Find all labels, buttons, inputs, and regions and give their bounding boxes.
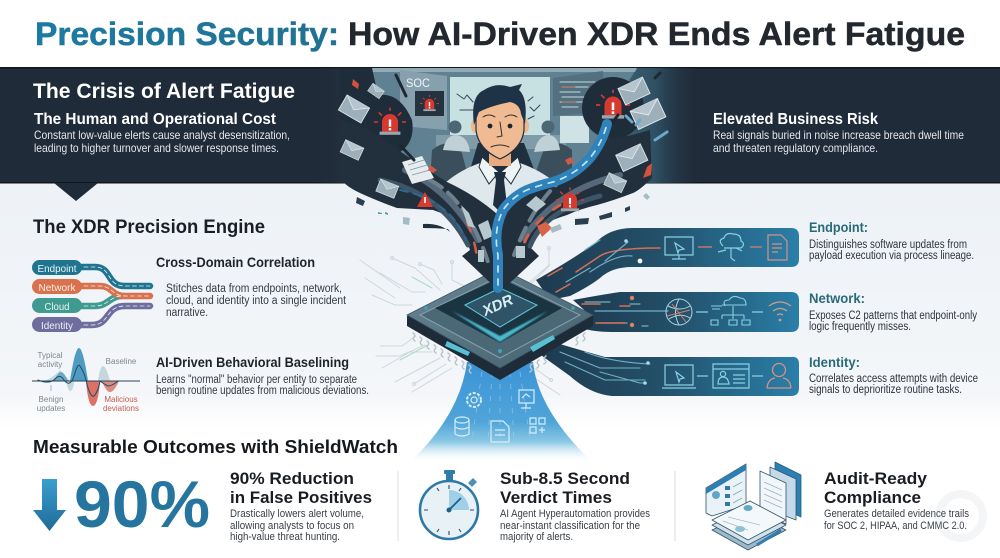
funnel streaks <box>380 165 620 262</box>
tie <box>493 172 507 212</box>
illustration: noise funnel <box>338 73 667 292</box>
shoulders shadow <box>470 143 535 190</box>
icon: document gear <box>768 235 787 260</box>
text block: elevated business risk: Real signals buried in noise increase breach dwell time <box>713 128 964 142</box>
icon: person <box>767 364 791 388</box>
chart labels <box>37 351 139 413</box>
text block: false positives: in False Positives <box>230 489 372 507</box>
text block: endpoint: Distinguishes software updates from <box>809 239 967 251</box>
text block: cross-domain correlation: Cross-Domain Correlation <box>156 255 315 270</box>
chart labels: Benign <box>39 395 63 404</box>
heading: XDR precision engine: The XDR Precision Engine <box>33 217 265 238</box>
text block: identity: Identity: <box>809 354 860 370</box>
text block: audit-ready compliance: Compliance <box>824 489 921 507</box>
pill: endpoint: Endpoint <box>38 263 77 275</box>
icon: wifi <box>769 302 791 315</box>
illustration: outgoing data beam <box>410 362 592 462</box>
text block: verdict times: AI Agent Hyperautomation provides <box>500 508 650 520</box>
pill: network: Network <box>38 282 76 294</box>
text block: human and operational cost: leading to higher turnover and slower response times. <box>34 141 279 155</box>
ribbon: endpoint <box>536 228 799 300</box>
debris <box>338 73 667 233</box>
text block: behavioral baselining: Learns "normal" behavior per entity to separate <box>156 374 357 386</box>
icon: monitor <box>665 237 693 259</box>
SOC left screen: SOC <box>406 76 430 90</box>
dark swirl blobs behind alarms <box>340 68 413 155</box>
icon: laptop <box>662 365 696 388</box>
text block: elevated business risk <box>713 111 964 155</box>
alarm right <box>596 90 630 119</box>
text block: human and operational cost <box>34 111 290 155</box>
text block: cross-domain correlation: Stitches data from endpoints, network, <box>166 283 342 295</box>
alarm left <box>374 108 406 135</box>
text block: false positives: high-value threat hunting. <box>230 531 340 543</box>
text block: cross-domain correlation <box>156 255 347 319</box>
chart labels: Typical <box>38 351 63 360</box>
ribbon: identity <box>538 342 799 396</box>
icon: audit documents <box>706 462 801 550</box>
torso <box>445 163 556 215</box>
text block: human and operational cost: The Human and Operational Cost <box>34 111 276 128</box>
icon: monitor <box>519 390 534 408</box>
text block: network: logic frequently misses. <box>809 321 911 333</box>
text block: cross-domain correlation: cloud, and identity into a single incident <box>166 295 347 307</box>
middle section background <box>0 183 1000 428</box>
back wall <box>367 68 637 183</box>
text block: endpoint: Endpoint: <box>809 219 868 235</box>
text block: network: Network: <box>809 290 865 306</box>
panel: crisis of alert fatigue band <box>0 67 1000 201</box>
text block: identity: signals to deprioritize routine tasks. <box>809 384 962 396</box>
icon: down arrow <box>33 479 66 531</box>
chart labels: deviations <box>103 404 139 413</box>
text block: verdict times <box>500 470 650 543</box>
text block: endpoint <box>809 219 974 262</box>
decorative circuit traces left of chip <box>360 246 560 395</box>
illustration: XDR chip <box>407 268 593 380</box>
icon: stopwatch <box>420 470 478 539</box>
diagram: cross-domain pills <box>32 260 150 332</box>
text block: false positives <box>230 470 372 543</box>
text block: false positives: 90% Reduction <box>230 470 354 488</box>
chart labels: Baseline <box>106 357 137 366</box>
icon: cloud topology <box>711 296 750 325</box>
illustration: stressed analyst <box>445 84 556 215</box>
chart labels: updates <box>37 404 65 413</box>
ribbon: network <box>573 292 799 332</box>
illustration: blue signal stream <box>496 124 607 288</box>
text block: cross-domain correlation: narrative. <box>166 307 208 319</box>
chart labels: activity <box>38 360 62 369</box>
browser window <box>706 464 746 516</box>
text block: network <box>809 290 977 333</box>
head <box>471 84 529 166</box>
text block: identity <box>809 354 978 396</box>
text block: behavioral baselining <box>156 355 369 397</box>
heading: measurable outcomes: Measurable Outcomes with ShieldWatch <box>33 436 398 457</box>
stat: 90%: 90% <box>74 467 210 541</box>
funnel body with arrowhead <box>340 120 652 292</box>
title <box>35 16 965 52</box>
title: Precision Security: <box>35 16 339 52</box>
text block: verdict times: Sub-8.5 Second <box>500 470 630 488</box>
text block: false positives: allowing analysts to focus on <box>230 520 354 532</box>
back pages <box>775 462 801 517</box>
text block: audit-ready compliance: Generates detailed evidence trails <box>824 508 969 520</box>
icon: grid <box>530 418 545 433</box>
text block: elevated business risk: Elevated Business Risk <box>713 111 878 128</box>
icon: cloud network <box>718 234 744 261</box>
chart labels: Malicious <box>104 395 138 404</box>
text block: audit-ready compliance <box>824 470 969 532</box>
icon: gear <box>467 393 481 407</box>
text block: elevated business risk: and threaten regulatory compliance. <box>713 141 878 155</box>
chip label: XDR <box>481 291 515 320</box>
text block: audit-ready compliance: for SOC 2, HIPAA, and CMMC 2.0. <box>824 520 967 532</box>
chip pins <box>413 333 585 373</box>
right code screen <box>553 71 603 143</box>
chart: behavioral baseline <box>32 348 140 413</box>
pill: identity: Identity <box>41 320 74 332</box>
text block: behavioral baselining: AI-Driven Behavioral Baselining <box>156 355 349 370</box>
watermark <box>939 494 983 538</box>
illustration: SOC analyst scene <box>312 68 702 183</box>
text block: verdict times: Verdict Times <box>500 489 612 507</box>
icon: profile window <box>713 364 749 388</box>
text block: audit-ready compliance: Audit-Ready <box>824 470 928 488</box>
background operators <box>430 120 572 183</box>
notch pointer <box>54 183 98 201</box>
text block: human and operational cost: Constant low-value elerts cause analyst desensitization, <box>34 128 290 142</box>
text block: verdict times: near-instant classification for the <box>500 520 640 532</box>
pill: cloud: Cloud <box>44 301 70 313</box>
text block: behavioral baselining: benign routine updates from malicious deviations. <box>156 385 369 397</box>
title: How AI-Driven XDR Ends Alert Fatigue <box>348 16 965 52</box>
stacked report <box>712 512 786 550</box>
text block: verdict times: majority of alerts. <box>500 531 573 543</box>
text block: false positives: Drastically lowers alert volume, <box>230 508 364 520</box>
icon: document <box>491 421 509 442</box>
heading: crisis: The Crisis of Alert Fatigue <box>33 80 295 103</box>
pencil <box>757 530 781 545</box>
icon: database <box>455 417 469 436</box>
icon: globe <box>666 299 692 325</box>
centre wall screen <box>436 77 566 149</box>
SOC left screen <box>400 70 447 130</box>
